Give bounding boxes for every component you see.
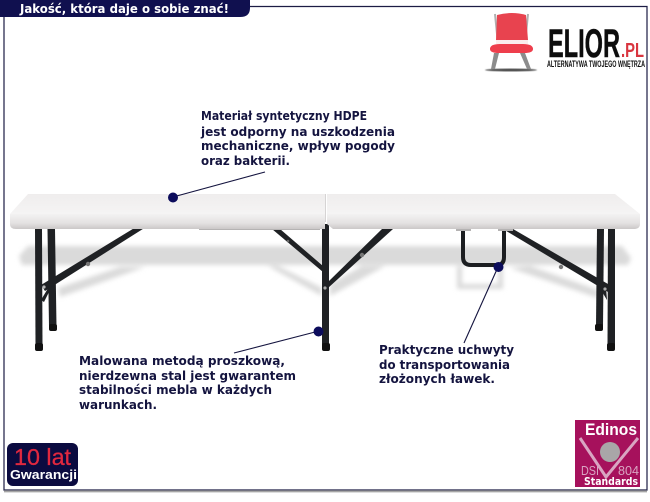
badge: 10 years warranty: 10 lat [14,444,72,470]
callout text: material: oraz bakterii. [201,154,290,168]
logo: Elior [485,13,645,71]
callout: handles [379,262,514,386]
folding bench illustration [10,194,640,351]
badge: Edinos DSI 804 Standards: Standards [584,475,638,488]
callout text: steel frame [79,354,296,412]
header banner: Jakość, która daje o sobie znać! [19,1,229,16]
callout text: handles [379,343,514,386]
callout text: handles: do transportowania [379,358,510,372]
callout text: handles: Praktyczne uchwyty [379,343,514,357]
callout: steel frame [79,326,324,412]
bench top [10,194,640,231]
icon: red chair [485,13,537,71]
callout text: material: Materiał syntetyczny HDPE [201,109,367,123]
callout: material [168,109,395,202]
callout marker: bench top [168,172,265,202]
badge: Edinos DSI 804 Standards [575,420,640,488]
callout marker: handle [464,262,504,343]
handle [463,229,504,265]
callout text: material: jest odporny na uszkodzenia [200,125,395,139]
callout text: material [200,109,395,168]
callout text: material: mechaniczne, wpływ pogody [201,139,395,153]
bench legs: right [503,229,615,351]
callout text: steel frame: Malowana metodą proszkową, [79,354,285,368]
floor shadows [19,246,631,298]
callout text: handles: złożonych ławek. [379,372,495,386]
callout marker: leg [234,326,324,353]
callout text: steel frame: warunkach. [79,398,157,412]
callout text: steel frame: stabilności mebla w każdych [79,383,272,397]
bench legs: centre [272,224,393,351]
bench legs: left [35,227,146,351]
badge: Edinos DSI 804 Standards: Edinos [585,420,637,439]
badge: 10 years warranty: Gwarancji [10,467,77,482]
badge: 10 years warranty [7,443,78,486]
callout text: steel frame: nierdzewna stal jest gwarantem [79,369,296,383]
badge: Edinos DSI 804 Standards: 804 [618,463,639,478]
badge: Edinos DSI 804 Standards: DSI [581,463,599,478]
